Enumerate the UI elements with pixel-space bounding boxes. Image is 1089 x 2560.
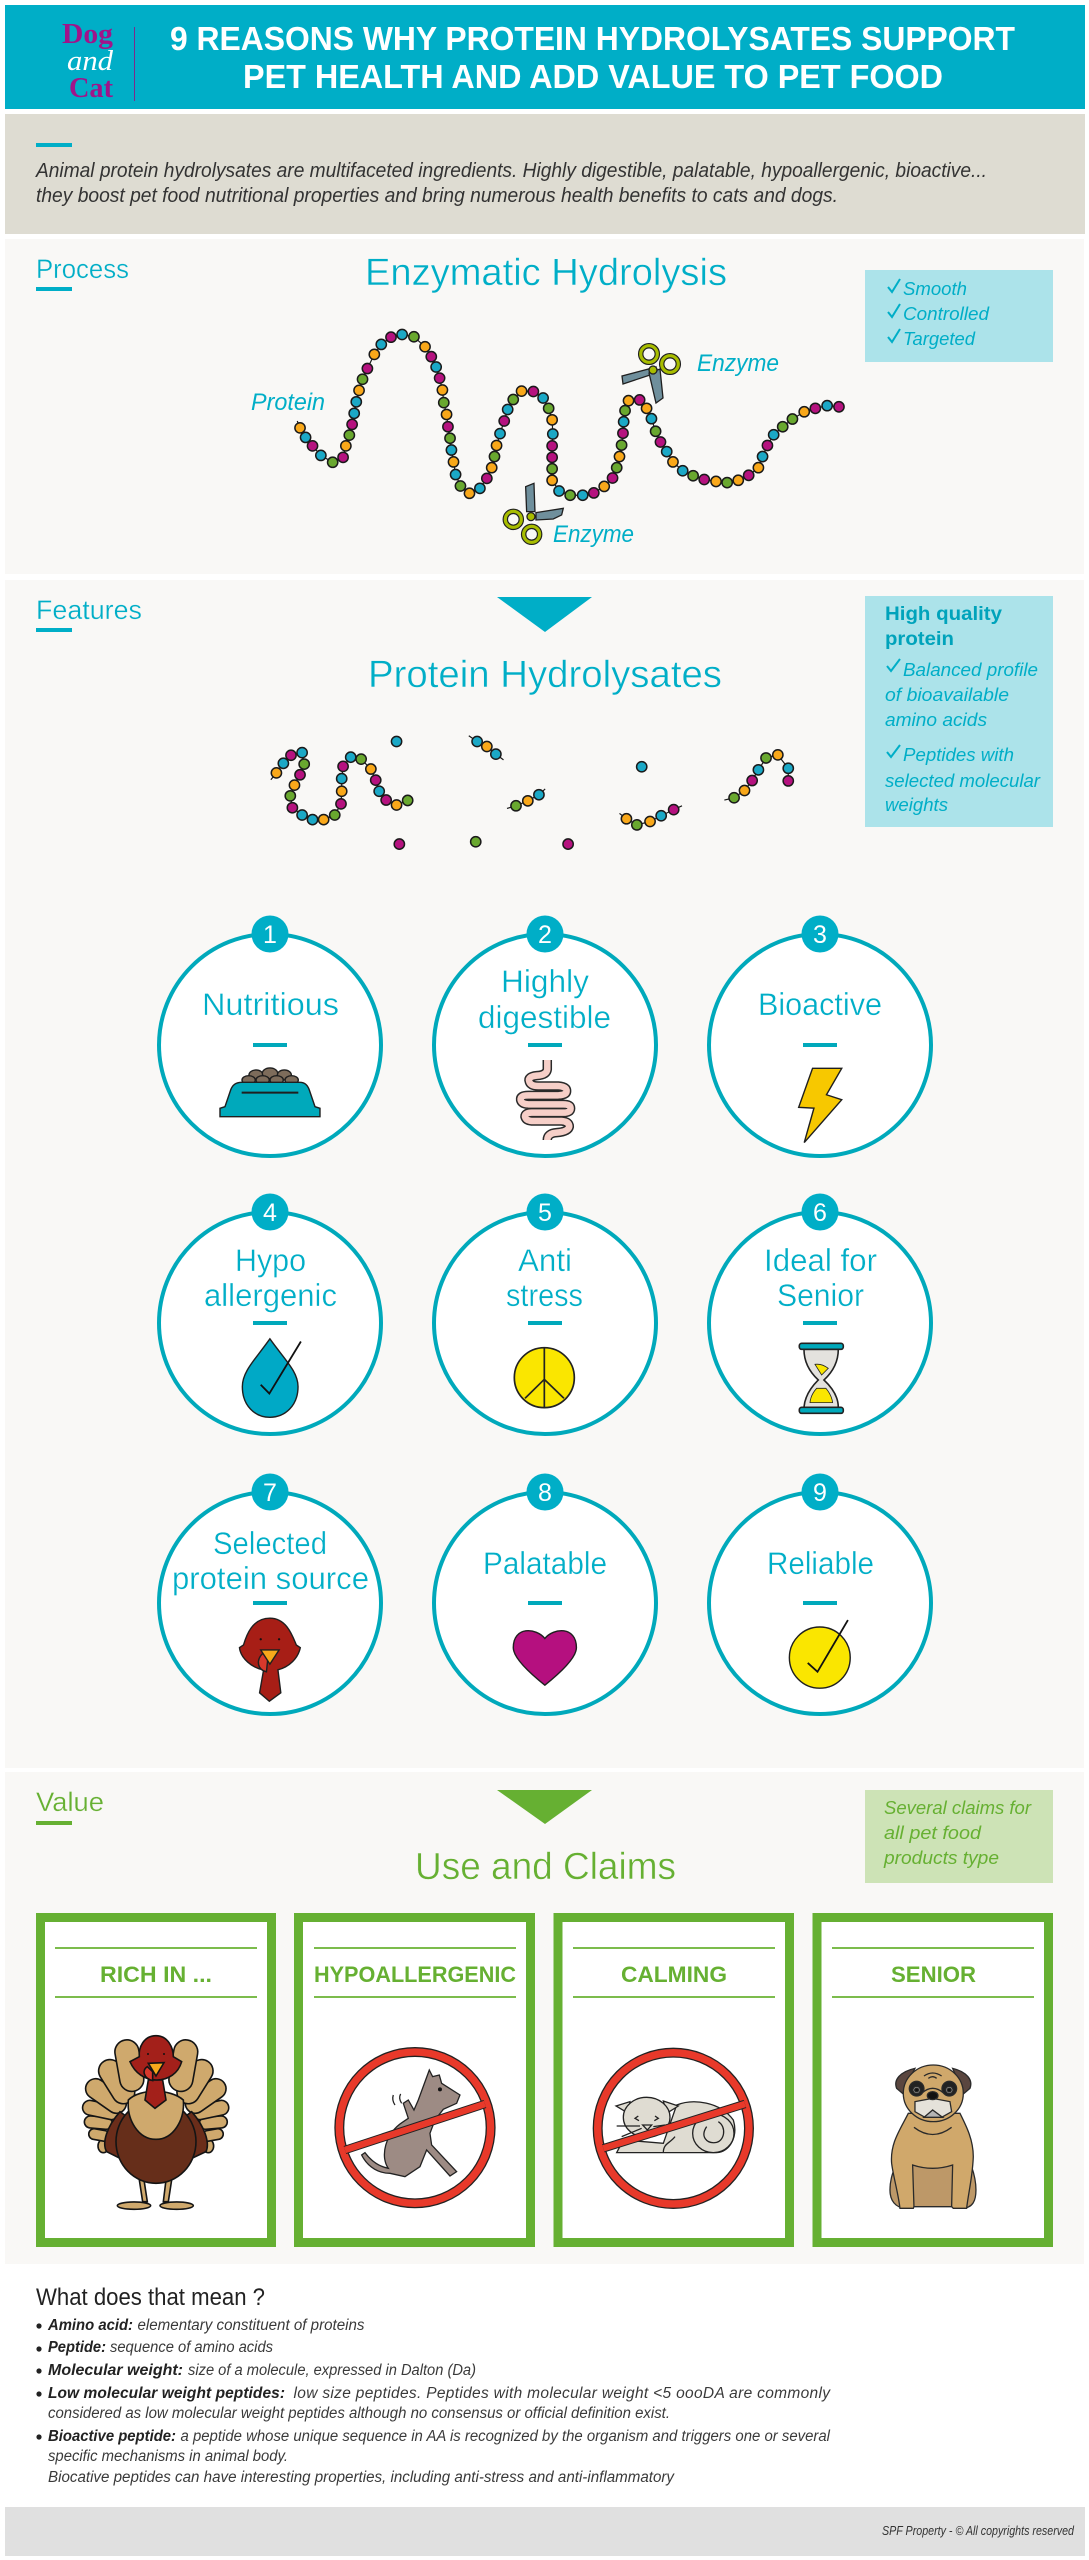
section label: value: Value [36, 1787, 104, 1817]
callout: high quality protein: weights [885, 794, 948, 815]
reason 3: bioactive: 3 [813, 921, 827, 949]
reason 6: ideal for senior [709, 1194, 931, 1434]
reason 7: selected protein source: 7 [263, 1479, 277, 1507]
glossary: what does that mean [36, 2284, 831, 2486]
reason 6: ideal for senior: 6 [813, 1199, 827, 1227]
definition: molecular weight: Molecular weight: [48, 2362, 183, 2379]
reason 5: anti stress: 5 [538, 1199, 552, 1227]
reason 2: highly digestible [434, 916, 656, 1156]
reason 1: nutritious [159, 916, 381, 1156]
reason 7: selected protein source [159, 1474, 381, 1714]
callout: high quality protein: selected molecular [885, 770, 1041, 791]
callout: smooth controlled targeted: Smooth [903, 279, 967, 299]
callout: high quality protein: Balanced profile [903, 659, 1038, 680]
label: enzyme upper: Enzyme [697, 350, 779, 377]
section label: process: Process [36, 254, 129, 284]
callout: several claims: products type [883, 1847, 999, 1868]
definition: amino acid: elementary constituent of proteins [138, 2317, 365, 2334]
icon: pug [890, 2065, 976, 2208]
peptide fragments [271, 736, 793, 849]
callout: high quality protein: High quality [885, 604, 1002, 625]
reason 7: selected protein source: protein source [172, 1560, 369, 1596]
icon: scissors upper [622, 346, 678, 403]
definition: low molecular weight peptides [48, 2385, 831, 2422]
icon: peace sign [514, 1348, 574, 1408]
reason 2: highly digestible: Highly [501, 963, 589, 999]
definition: low molecular weight peptides: considered as low molecular weight peptides although no consensus or official definition exist. [48, 2405, 670, 2422]
definition: peptide: sequence of amino acids [110, 2339, 273, 2356]
protein chain [295, 329, 844, 500]
icon: turkey [81, 2036, 230, 2209]
definition: low molecular weight peptides: low size peptides. Peptides with molecular weight <5 oooDA are commonly [294, 2385, 831, 2402]
footer [5, 2507, 1085, 2556]
logo: and [67, 45, 114, 77]
reason 8: palatable: Palatable [483, 1545, 607, 1581]
header banner [5, 5, 1085, 109]
icon: check circle [789, 1620, 850, 1688]
heading: use and claims: Use and Claims [415, 1846, 676, 1888]
panel: value [5, 1772, 1084, 2264]
callout: high quality protein: protein [885, 629, 954, 650]
logo: Dog [62, 18, 114, 50]
glossary heading: What does that mean ? [36, 2284, 265, 2311]
card: calming: CALMING [621, 1962, 727, 1987]
callout: smooth controlled targeted: Targeted [903, 329, 976, 349]
icon: sleeping cat with prohibition sign [593, 2048, 753, 2208]
logo [62, 18, 135, 104]
icon: turkey head [239, 1618, 300, 1701]
icon: scissors lower [505, 483, 563, 542]
callout: several claims [865, 1790, 1053, 1883]
reason 7: selected protein source: Selected [213, 1525, 327, 1561]
reason 9: reliable [709, 1474, 931, 1714]
icon: hourglass [799, 1343, 843, 1413]
icon: scratching dog with prohibition sign [335, 2048, 495, 2208]
definition: low molecular weight peptides: Low molecular weight peptides: [48, 2385, 285, 2402]
card: hypoallergenic [298, 1918, 530, 2242]
icon: heart [513, 1631, 576, 1685]
card: hypoallergenic: HYPOALLERGENIC [314, 1962, 516, 1987]
callout: high quality protein [865, 596, 1053, 827]
intro text: they boost pet food nutritional properties and bring numerous health benefits to cats and dogs. [36, 185, 838, 207]
title: PET HEALTH AND ADD VALUE TO PET FOOD [243, 58, 943, 95]
reason 5: anti stress: Anti [518, 1242, 572, 1278]
card: senior [817, 1918, 1048, 2242]
arrow: teal down triangle [497, 597, 592, 632]
reason 4: hypoallergenic: allergenic [204, 1277, 337, 1313]
heading: protein hydrolysates: Protein Hydrolysates [368, 654, 722, 696]
logo: Cat [69, 72, 113, 104]
heading: enzymatic hydrolysis: Enzymatic Hydrolysis [365, 252, 727, 294]
icon: intestine [521, 1060, 571, 1140]
definition: bioactive peptide: a peptide whose unique sequence in AA is recognized by the organism and triggers one or several [180, 2428, 831, 2445]
definition: bioactive peptide: specific mechanisms in animal body. [48, 2448, 288, 2465]
title: 9 REASONS WHY PROTEIN HYDROLYSATES SUPPORT [170, 20, 1015, 57]
reason 4: hypoallergenic: 4 [263, 1199, 277, 1227]
definition: peptide: Peptide: [48, 2339, 106, 2356]
callout: high quality protein: Peptides with [903, 744, 1014, 765]
definition: amino acid: Amino acid: [47, 2317, 133, 2334]
reason 4: hypoallergenic: Hypo [235, 1242, 306, 1278]
reason 1: nutritious: Nutritious [202, 986, 339, 1022]
label: enzyme lower: Enzyme [553, 521, 634, 548]
callout: several claims: all pet food [884, 1822, 982, 1843]
intro text: Animal protein hydrolysates are multifaceted ingredients. Highly digestible, palatable, hypoallergenic, bioactive... [35, 160, 987, 182]
definition: peptide [48, 2339, 273, 2356]
callout: high quality protein: amino acids [885, 709, 987, 730]
intro text [35, 160, 987, 207]
definition: molecular weight [48, 2362, 476, 2379]
reason 5: anti stress [434, 1194, 656, 1434]
reason 8: palatable [434, 1474, 656, 1714]
reason 4: hypoallergenic [159, 1194, 381, 1434]
intro panel [5, 114, 1085, 234]
definition: bioactive peptide [48, 2428, 831, 2486]
card: senior: SENIOR [891, 1962, 976, 1987]
reason 9: reliable: Reliable [767, 1545, 874, 1581]
reason 1: nutritious: 1 [263, 921, 277, 949]
arrow: green down triangle [497, 1790, 592, 1824]
definition: molecular weight: size of a molecule, expressed in Dalton (Da) [188, 2362, 476, 2379]
card: calming [558, 1918, 790, 2242]
icon: water drop with check [242, 1339, 301, 1417]
reason 3: bioactive: Bioactive [758, 986, 882, 1022]
title [170, 20, 1015, 95]
definition: bioactive peptide: Biocative peptides can have interesting properties, including anti-stress and anti-inflammatory [48, 2469, 675, 2486]
glossary bullets [36, 2323, 42, 2440]
label: protein: Protein [251, 389, 325, 416]
card: rich in: RICH IN ... [100, 1962, 212, 1987]
reason 9: reliable: 9 [813, 1479, 827, 1507]
reason 3: bioactive [709, 916, 931, 1156]
reason 5: anti stress: stress [506, 1277, 583, 1313]
reason 2: highly digestible: 2 [538, 921, 552, 949]
reason 6: ideal for senior: Ideal for [764, 1242, 877, 1278]
panel: features [5, 580, 1084, 1768]
callout: smooth controlled targeted [865, 270, 1053, 362]
callout: several claims: Several claims for [884, 1797, 1032, 1818]
icon: lightning bolt [799, 1068, 842, 1143]
panel: process [5, 239, 1084, 574]
reason 2: highly digestible: digestible [478, 999, 611, 1035]
reason 8: palatable: 8 [538, 1479, 552, 1507]
reason 6: ideal for senior: Senior [777, 1277, 864, 1313]
section label: features: Features [36, 595, 142, 625]
icon: food bowl [220, 1068, 320, 1117]
card: rich in [40, 1918, 272, 2242]
callout: high quality protein: of bioavailable [885, 684, 1009, 705]
callout: smooth controlled targeted: Controlled [903, 304, 990, 324]
definition: bioactive peptide: Bioactive peptide: [48, 2428, 176, 2445]
